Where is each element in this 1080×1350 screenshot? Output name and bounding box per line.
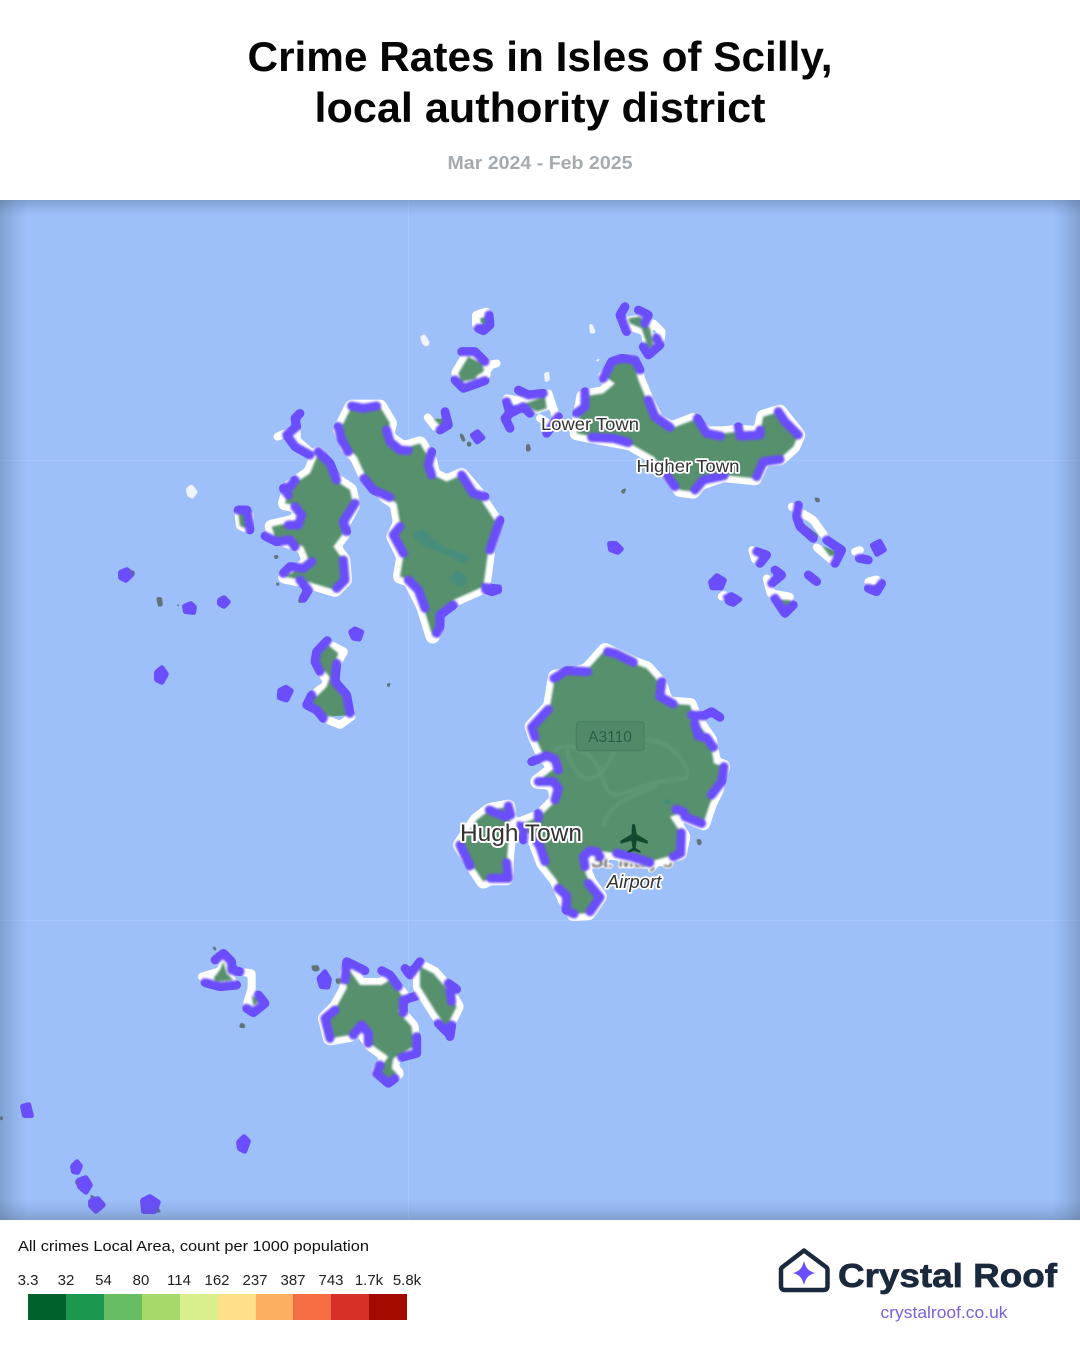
map panel (0, 200, 1080, 1220)
islets: St Helen's and Northwethel area (428, 312, 497, 443)
legend: colour scale: 387 (280, 1272, 306, 1289)
crime boundary segments: St Mary's (503, 652, 724, 914)
road sign: A3110 (576, 722, 644, 751)
small offshore rocks and islets (0, 323, 820, 1213)
subtitle: date range: Mar 2024 - Feb 2025 (448, 153, 632, 173)
labels: Lower Town and Higher Town: Higher Town (636, 456, 740, 476)
icon: airport plane (621, 824, 648, 853)
legend: colour scale (18, 1272, 422, 1320)
islet west of Bryher (238, 510, 250, 530)
crime boundary segments: Tresco (338, 406, 500, 633)
legend: colour scale: 32 (58, 1272, 74, 1289)
legend title: All crimes Local Area, count per 1000 population (18, 1238, 369, 1255)
legend: colour scale: 5.8k (393, 1272, 422, 1289)
island: St Martin's (577, 358, 798, 492)
title: Crime Rates in Isles of Scilly, (248, 33, 832, 80)
title: local authority district (314, 84, 766, 131)
island: Tean (505, 390, 558, 433)
label: St Mary's (clipped by coast): St. Mary's (591, 850, 673, 871)
road sign: A3110: A3110 (588, 729, 632, 746)
legend: colour scale: 1.7k (355, 1272, 384, 1289)
island: Bryher (265, 413, 355, 598)
labels: Lower Town and Higher Town: Lower Town (541, 414, 639, 434)
legend: colour scale: 3.3 (18, 1272, 38, 1289)
map edge shading (0, 200, 1080, 1220)
legend: colour scale: 54 (95, 1272, 112, 1289)
island: Round Island group north (620, 307, 662, 355)
legend: colour scale: 237 (242, 1272, 268, 1289)
scattered small crime areas west and south (22, 543, 622, 1212)
label: Hugh Town: Hugh Town (460, 820, 582, 847)
legend: colour scale: 162 (204, 1272, 230, 1289)
island: Tresco (338, 406, 500, 637)
crime boundary segments: St Martin's (577, 358, 798, 490)
island shapes (0, 307, 885, 1213)
island: Samson (279, 628, 362, 725)
crime boundary segments: Bryher (265, 413, 355, 598)
island: Annet (202, 953, 265, 1013)
island: St Agnes (312, 962, 420, 1083)
logo: Crystal Roof: Crystal Roof (838, 1257, 1058, 1294)
legend: colour scale: 114 (167, 1272, 191, 1289)
labels: Lower Town and Higher Town (541, 414, 740, 476)
title (248, 33, 832, 131)
footer white band (0, 1220, 1080, 1350)
legend: colour scale: 743 (318, 1272, 344, 1289)
label: Airport: Airport (606, 871, 662, 892)
logo: Crystal Roof (781, 1250, 1058, 1322)
logo: Crystal Roof: crystalroof.co.uk (880, 1304, 1008, 1322)
island: St Mary's (503, 650, 724, 914)
icon: house with star (781, 1250, 828, 1290)
island: Gugh and Hugh Town peninsula west (460, 806, 511, 882)
roads and water on St Mary's (553, 740, 687, 827)
legend: colour scale: 80 (133, 1272, 149, 1289)
Eastern Isles (710, 498, 885, 613)
island: Gugh (405, 962, 457, 1037)
